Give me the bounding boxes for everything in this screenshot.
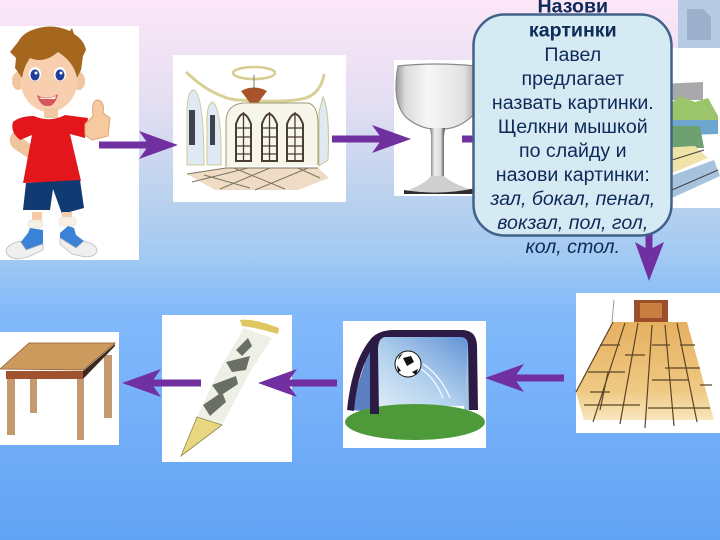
callout text: назвать картинки.	[492, 92, 654, 114]
callout text: Павел	[544, 44, 601, 66]
picture: boy with thumb up	[0, 26, 139, 260]
picture: goblet	[394, 60, 484, 196]
arrow: goal to stake	[258, 369, 337, 397]
callout text: предлагает	[522, 68, 624, 90]
picture: table	[0, 332, 119, 445]
picture: railway station	[660, 48, 720, 208]
callout text: кол, стол.	[526, 236, 620, 258]
callout text: по слайду и	[519, 140, 627, 162]
arrow: hall to goblet	[332, 125, 411, 153]
arrow: floor to goal	[485, 364, 564, 392]
callout box	[474, 14, 672, 236]
callout text: зал, бокал, пенал,	[489, 188, 655, 210]
callout text: картинки	[529, 20, 617, 42]
callout text: Щелкни мышкой	[498, 116, 648, 138]
arrow: boy to hall	[99, 131, 178, 159]
icon: document button	[678, 0, 720, 48]
arrow: stake to table	[122, 369, 201, 397]
picture: birch stake	[162, 315, 292, 462]
arrow: goblet to station	[462, 136, 476, 142]
picture: football goal	[343, 321, 486, 448]
picture: hall	[173, 55, 346, 202]
callout text: вокзал, пол, гол,	[497, 212, 648, 234]
arrow: station to floor	[635, 225, 664, 281]
picture: floor	[576, 293, 720, 433]
callout text: назови картинки:	[496, 164, 650, 186]
